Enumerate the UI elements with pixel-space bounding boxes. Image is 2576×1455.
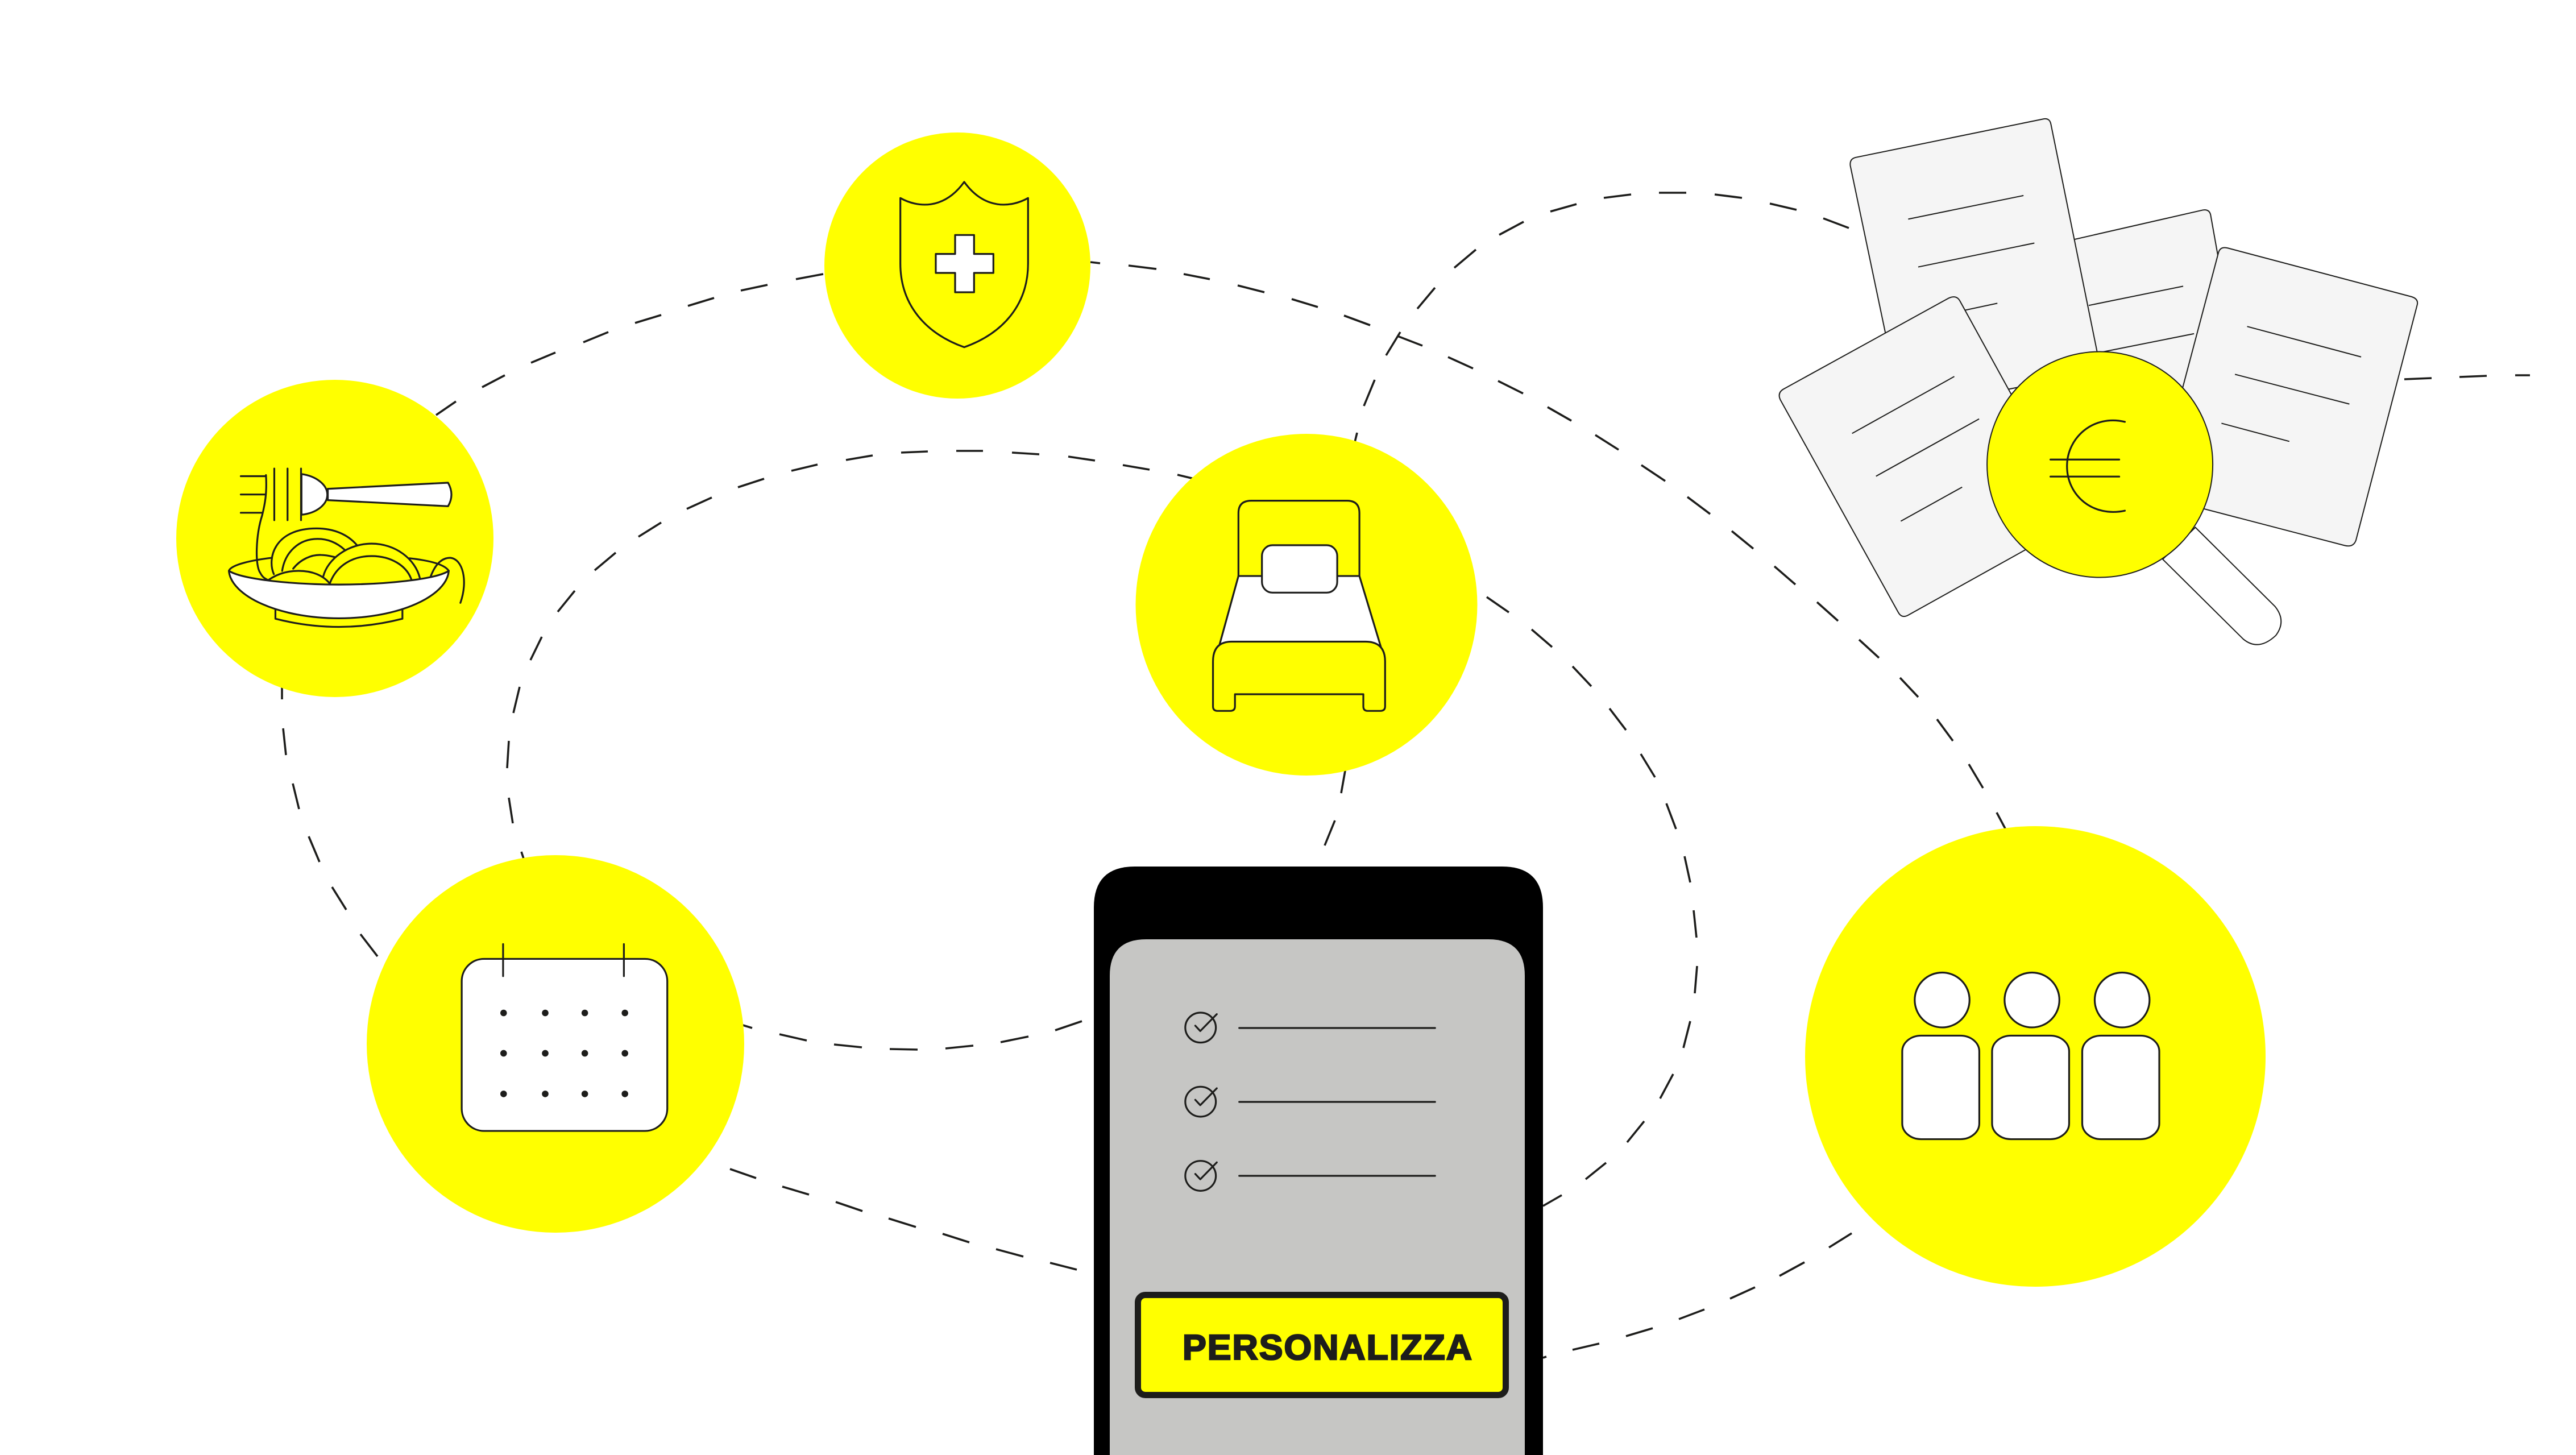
route: people to phone (1543, 1233, 1852, 1358)
route: bed to phone right side (1487, 597, 1697, 1206)
route: food to calendar (282, 685, 378, 956)
document: back (2023, 210, 2241, 421)
route: documents to page edge (2404, 375, 2530, 379)
document: right (2154, 247, 2417, 546)
documents with magnifier (1779, 119, 2417, 645)
icon: euro sign (2051, 420, 2125, 512)
document: top left (1850, 119, 2101, 411)
button label: PERSONALIZZA (1183, 1328, 1473, 1367)
checklist row 2 (1185, 1087, 1435, 1117)
route: shield to people (1090, 262, 2006, 830)
route: calendar to phone (739, 1021, 1082, 1050)
route: food to shield (436, 274, 823, 415)
phone body (1094, 867, 1543, 1455)
route: bed to phone (1325, 768, 1346, 845)
checklist row 3 (1185, 1161, 1435, 1191)
checklist row 1 (1185, 1013, 1435, 1043)
checklist (1185, 1013, 1435, 1191)
icon: spaghetti and fork (229, 469, 464, 627)
dashed route network (282, 193, 2530, 1358)
route: documents to bed (1353, 193, 1849, 449)
icon: shield with cross (901, 182, 1028, 347)
route: calendar to bed loop (507, 451, 1194, 859)
circle: insurance (824, 132, 1090, 399)
circle: travellers (1805, 826, 2266, 1287)
phone screen (1110, 939, 1525, 1455)
magnifier handle (2163, 528, 2281, 645)
icon: three people (1902, 973, 2159, 1139)
button: personalizza (1138, 1295, 1505, 1395)
circle: accommodation (1136, 434, 1477, 776)
icon: calendar (462, 944, 667, 1131)
circle: food (176, 380, 493, 697)
icon: bed (1213, 501, 1385, 711)
document: left (1779, 297, 2080, 616)
documents and handle (1779, 119, 2417, 645)
phone (1094, 867, 1543, 1455)
circle: calendar (367, 855, 744, 1233)
route: calendar to phone lower (730, 1169, 1077, 1270)
magnifier lens (1987, 351, 2213, 578)
